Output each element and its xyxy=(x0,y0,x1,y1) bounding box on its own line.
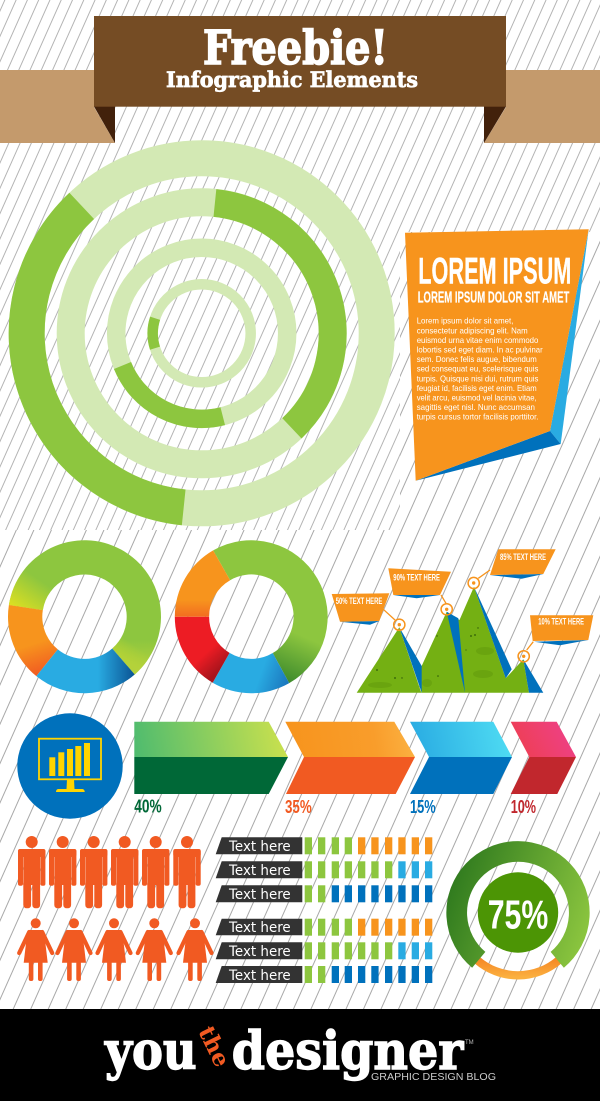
icons: women row xyxy=(19,918,212,981)
logo: designer: designer xyxy=(232,1021,464,1082)
gauge orange arc xyxy=(477,960,559,975)
callout 50% xyxy=(332,593,405,630)
third ring xyxy=(116,248,287,419)
label text: Text here xyxy=(228,839,291,855)
arrow 10% xyxy=(511,722,576,817)
row 3 segments xyxy=(305,885,432,902)
mountain texture xyxy=(368,627,494,688)
blue segment xyxy=(36,648,135,693)
donut chart two xyxy=(175,540,328,693)
panel body text: lobortis sed eget diam. In ac pulvinar xyxy=(417,346,543,354)
orange segment xyxy=(8,605,58,676)
concentric ring chart xyxy=(27,158,377,508)
panel light blue side xyxy=(550,229,589,444)
panel body text: velit arcu, euismod vel lacinia vitae, xyxy=(417,394,537,402)
75% gauge xyxy=(457,851,579,975)
ribbon panel xyxy=(94,16,506,107)
gauge value: 75% xyxy=(488,891,548,937)
trademark: TM xyxy=(465,1040,474,1046)
panel dark blue side xyxy=(416,431,561,481)
label text: Text here xyxy=(228,863,291,879)
row 5 segments xyxy=(305,942,432,959)
subtitle: Infographic Elements xyxy=(166,67,418,92)
callout 85% xyxy=(468,549,556,589)
ribbon folds xyxy=(94,106,506,143)
green segment xyxy=(9,540,161,674)
orange segment xyxy=(175,550,230,617)
callout 90%: 90% TEXT HERE xyxy=(393,573,440,583)
label text xyxy=(228,839,291,984)
callout 10% xyxy=(518,615,593,662)
red segment xyxy=(175,617,230,683)
gauge green arc xyxy=(457,851,579,960)
icons: men row xyxy=(18,836,201,908)
logo: the: the xyxy=(193,1022,235,1071)
footer xyxy=(0,1009,600,1101)
panel face xyxy=(405,229,589,481)
callout 50%: 50% TEXT HERE xyxy=(336,596,382,606)
row 2 segments xyxy=(305,861,432,878)
mountain chart xyxy=(332,549,593,693)
arrow 35% xyxy=(285,722,415,817)
green segment xyxy=(213,540,328,683)
label bars xyxy=(216,837,302,983)
logo: you: you xyxy=(104,1021,197,1082)
callout 85%: 85% TEXT HERE xyxy=(500,552,546,562)
panel body text: consectetur adipiscing elit. Nam xyxy=(417,326,528,335)
panel body text xyxy=(417,317,543,422)
label text: Text here xyxy=(228,968,291,984)
orange text panel xyxy=(405,229,589,481)
blue segment xyxy=(213,653,289,693)
row 4 segments xyxy=(305,919,432,936)
arrow 35%: 35% xyxy=(285,797,312,817)
callout 90% xyxy=(388,568,452,615)
gauge centre disc xyxy=(478,872,558,953)
panel body text: sagittis eget nisl. Nunc accumsan xyxy=(417,403,535,412)
panel body text: feugiat id, facilisis eget enim. Etiam xyxy=(417,384,537,393)
arrow 15%: 15% xyxy=(410,797,436,817)
arrow 40%: 40% xyxy=(134,797,162,817)
title: Freebie! xyxy=(203,21,388,76)
panel body text: sed consequat eu, scelerisque quis xyxy=(417,365,538,374)
panel body text: turpis cursus tortor facilisis porttitor. xyxy=(417,413,538,422)
donut chart one xyxy=(8,540,161,693)
outer ring xyxy=(27,158,377,508)
panel body text: turpis. Quisque nisi dui, rutrum quis xyxy=(417,374,538,383)
tagline: GRAPHIC DESIGN BLOG xyxy=(371,1072,496,1083)
panel body text: sem. Donec felis augue, bibendum xyxy=(417,355,537,364)
icon: monitor with bar chart xyxy=(17,713,123,819)
panel body text: Lorem ipsum dolor sit amet, xyxy=(417,317,513,326)
arrow 40% xyxy=(134,722,288,817)
ribbon tails xyxy=(0,70,600,143)
arrow 15% xyxy=(410,722,512,817)
header ribbon xyxy=(0,16,600,143)
arrow 10%: 10% xyxy=(511,797,536,817)
inner ring xyxy=(153,284,251,382)
label text: Text here xyxy=(228,944,291,960)
row 6 segments xyxy=(305,966,432,983)
second ring xyxy=(71,202,333,464)
mountain peaks xyxy=(357,587,529,693)
panel body text: euismod urna vitae enim commodo xyxy=(417,336,539,345)
row 1 segments xyxy=(305,837,432,854)
segmented bar table xyxy=(216,837,432,984)
label text: Text here xyxy=(228,920,291,936)
mountain shadows xyxy=(399,587,543,693)
label text: Text here xyxy=(228,887,291,903)
